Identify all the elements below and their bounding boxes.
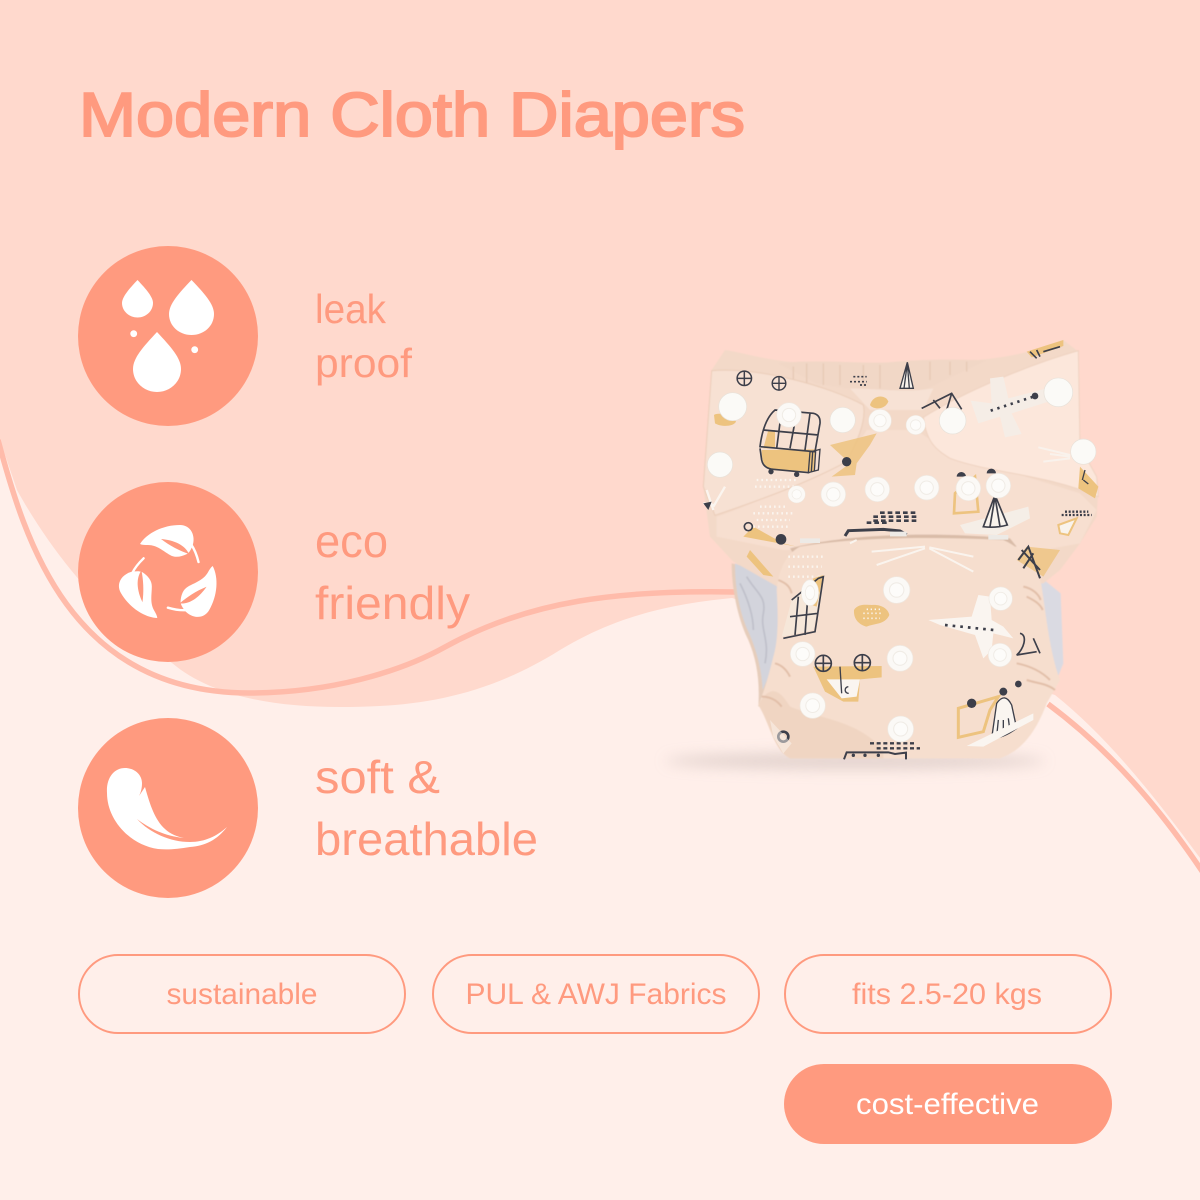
print: bus lower left — [782, 557, 825, 638]
diaper outer edge left — [732, 563, 790, 707]
diaper front panel shading — [758, 691, 883, 758]
diaper front lower panel — [758, 538, 1060, 758]
label: eco friendly: eco — [315, 515, 388, 567]
icon: water drops — [78, 246, 258, 426]
pill: cost-effective: cost-effective — [856, 1088, 1039, 1121]
print: waist tents — [850, 362, 962, 410]
pill: fits 2.5-20 kgs: fits 2.5-20 kgs — [852, 978, 1042, 1011]
label: soft and breathable: breathable — [315, 813, 538, 865]
diaper snaps: rings — [777, 403, 1012, 742]
diaper snaps: caps — [707, 378, 1096, 477]
print: bottom right tent and vehicle — [770, 681, 1033, 759]
diaper inner gray lining — [735, 563, 1063, 697]
pill: PUL and AWJ fabrics — [433, 955, 759, 1033]
label: eco friendly: friendly — [315, 577, 470, 629]
print: plane lower right — [928, 595, 1040, 658]
icon: recycling leaves — [78, 482, 258, 662]
print: cat whiskers — [850, 540, 973, 572]
print: plane top right — [971, 340, 1098, 498]
diaper ground shadow — [665, 753, 1045, 769]
label: soft and breathable: soft & — [315, 751, 440, 803]
diaper front seam shadow — [790, 535, 1017, 553]
wave line: right — [1048, 704, 1200, 874]
diaper center panel — [717, 430, 1097, 550]
pill: PUL and AWJ fabrics: PUL & AWJ Fabrics — [466, 978, 726, 1011]
diaper right flap — [923, 351, 1098, 497]
label: leak proof: proof — [315, 340, 413, 386]
diaper back body — [703, 340, 1098, 590]
print: snap rivets under front panel — [800, 534, 1008, 541]
wave line: left — [0, 440, 735, 693]
pill: sustainable — [79, 955, 405, 1033]
print: cloud lower — [854, 605, 889, 627]
pill: sustainable: sustainable — [166, 978, 318, 1011]
label: leak proof: leak — [315, 286, 386, 332]
print: center prints — [703, 433, 1092, 578]
diaper elastic gathers — [762, 580, 1055, 707]
pill: cost-effective — [784, 1064, 1112, 1144]
diaper waist elastic — [778, 360, 987, 410]
print: top wheels and cloud — [714, 371, 888, 426]
background: peach wave upper area — [0, 0, 1200, 858]
print: vehicle lower center — [813, 655, 882, 702]
title: Modern Cloth Diapers — [79, 81, 745, 150]
diaper left flap — [703, 370, 864, 515]
icon: feather — [78, 718, 258, 898]
print: bus top left — [760, 410, 820, 477]
pill: fits 2.5-20 kgs — [785, 955, 1111, 1033]
diaper photo illustration — [703, 340, 1098, 759]
